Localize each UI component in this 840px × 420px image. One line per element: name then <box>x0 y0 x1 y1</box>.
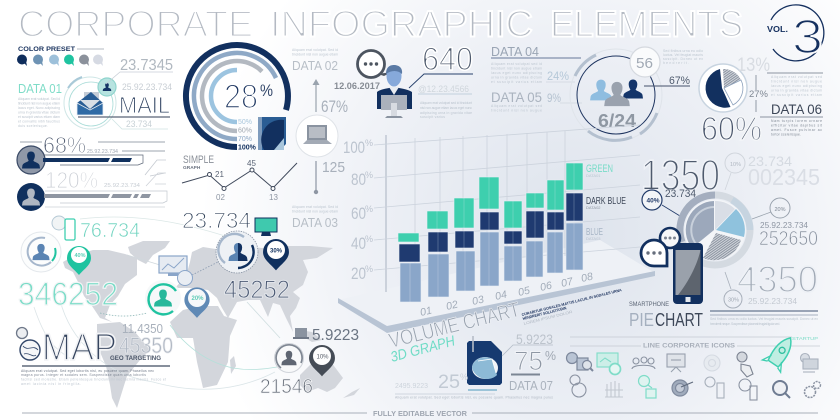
data 04 and 05: urna in gravida vitae dictum <box>491 76 542 80</box>
map avatar and pin 30%: 30% <box>270 248 283 254</box>
category labels: 06 <box>539 280 553 294</box>
map avatar and pin 30%: 45252 <box>224 276 290 304</box>
volume badge: 3 <box>792 11 823 64</box>
icon: rocket startup <box>762 332 800 372</box>
icon: monitor folder <box>800 354 818 372</box>
color preset: COLOR PRESET <box>18 46 75 53</box>
chart legend: GREEN <box>586 163 613 175</box>
chart axis labels: % <box>365 234 373 244</box>
bar 04 <box>479 177 499 286</box>
chart title <box>387 288 622 366</box>
chart legend: DATA02 <box>586 205 601 210</box>
map orbit lines <box>34 217 280 389</box>
chart axis labels: 20 <box>351 264 366 283</box>
data 04 and 05: DATA 05 <box>491 89 542 105</box>
data 02 and 03 column: DATA 03 <box>292 215 338 230</box>
map avatar and pin 10% <box>260 327 359 398</box>
pie chart with smartphone: 25.92.23.734 <box>760 221 809 230</box>
pie chart with smartphone: 40% <box>646 198 660 204</box>
icon: smartphone <box>673 243 703 304</box>
data 07 document pie: 5.9223 <box>516 331 553 347</box>
pie chart data 06: Nam turpis lorem ornare <box>771 119 822 123</box>
pie chart data 06: DATA 06 <box>771 101 822 117</box>
chart legend: DATA01 <box>586 173 601 178</box>
map avatar and pin 10%: 21546 <box>260 376 313 398</box>
map title block: MAP <box>42 327 117 369</box>
chart title: LOREM IPSUM DOLOR <box>523 310 573 326</box>
icon: team <box>632 357 655 369</box>
icon: target <box>672 380 693 396</box>
map avatar and pin 40%: 76.734 <box>80 220 140 242</box>
volume badge <box>767 5 824 64</box>
simple graph: 45 <box>247 159 256 168</box>
simple graph: 02 <box>216 193 225 202</box>
map title block: 11.4350 <box>122 321 163 336</box>
map avatar and pin 40% <box>18 216 140 312</box>
pie chart with smartphone: 20% <box>774 207 786 213</box>
bar 07 <box>547 180 564 273</box>
line corporate icons: LINE CORPORATE ICONS <box>643 342 735 350</box>
data 01 block: et convallis nibh faucibus <box>18 120 60 124</box>
mail icon and label: 25.92.23.734 <box>122 82 172 92</box>
chart axis labels: 40 <box>351 234 366 253</box>
pie chart with smartphone: 252650 <box>759 228 818 250</box>
data 04 and 05: 24% <box>547 69 569 83</box>
data 01 block: tincidunt nisl non augue etiam <box>18 102 60 106</box>
pie chart with smartphone: 1350 <box>641 151 720 200</box>
presenter icon with 640: @12.23.4566 <box>418 84 469 94</box>
icon: city chart <box>605 381 623 397</box>
category labels <box>419 271 594 319</box>
map avatar and pin 10%: 5.9223 <box>312 327 359 344</box>
category labels: 04 <box>494 289 508 303</box>
data 04 and 05: DATA 04 <box>491 44 539 59</box>
color preset <box>17 46 104 66</box>
bar 03 <box>454 198 475 291</box>
category labels: 03 <box>471 294 485 308</box>
data 01 block <box>18 81 62 128</box>
data 02 and 03 column <box>292 48 348 230</box>
chart grid <box>374 125 640 292</box>
bar 02 <box>427 211 449 297</box>
chart title: 3D GRAPH <box>389 333 457 366</box>
chart legend: BLUE <box>586 226 603 238</box>
data 01 block: urna in gravida vitae dictum <box>18 110 60 114</box>
simple graph: SIMPLE <box>183 154 214 166</box>
icon: teal presentation <box>597 353 620 374</box>
pie chart data 06 <box>699 55 823 147</box>
title: INFOGRAPHIC <box>270 4 533 44</box>
chart title: CURABITUR GOSALES MATTIS LACUS, IN SODALES URNA <box>521 288 622 317</box>
icon: teal chat <box>638 376 656 398</box>
bar 08 <box>566 163 583 270</box>
presenter icon with 640: suscipit varius <box>420 115 445 119</box>
donut pie <box>680 195 750 265</box>
chart legend: DARK BLUE <box>586 195 626 207</box>
presenter icon with 640: nisl non augue etiam lacus eget nunc <box>420 106 472 110</box>
data 07 document pie: 25 <box>438 372 460 393</box>
presenter icon with 640: 12.06.2017 <box>334 81 380 92</box>
data 04 and 05: et suscipit varius etiam <box>491 80 542 84</box>
data 02 and 03 column: Aliquam erat volutpat. Sed id <box>292 205 338 209</box>
team circle 6/24: 56 <box>636 55 653 72</box>
radial ring chart 28%: 70% <box>238 136 252 143</box>
pie chart data 06: amet. Fusce pulvinar ac <box>771 128 822 132</box>
line corporate icons: STARTUP <box>792 336 818 341</box>
pie chart data 06: tincidunt nisl non augue <box>771 80 822 84</box>
data 07 document pie: 2495.9223 <box>395 383 428 390</box>
chart axis labels: % <box>365 170 373 180</box>
data 07 document pie: DATA 07 <box>509 378 553 393</box>
data 07 document pie <box>395 331 556 400</box>
world map <box>63 241 360 408</box>
map avatar and pin 40%: 346252 <box>18 276 118 312</box>
icon: faded circle <box>704 355 720 371</box>
map title block: magna purus. Integer et sodales sem. Suspendisse quam urna lobortis <box>21 373 146 377</box>
chart legend: DATA03 <box>586 236 601 241</box>
presenter icon with 640 <box>334 41 473 119</box>
map title block: 45350 <box>119 333 173 358</box>
bar 05 <box>504 201 522 281</box>
map avatar and pin 30%: 23.734 <box>182 208 251 233</box>
data 02 and 03 column: 67% <box>321 98 348 116</box>
volume badge: VOL. <box>767 24 788 34</box>
presenter icon with 640: adipiscing urna in gravida vitae <box>420 111 472 115</box>
pie chart with smartphone: PIE <box>629 310 654 330</box>
map avatar and pin 30% <box>184 213 290 298</box>
pie chart with smartphone: CHART <box>655 310 703 330</box>
category labels: 07 <box>560 275 575 290</box>
pie chart with smartphone: 23.734 <box>665 188 696 200</box>
team circle 6/24: 6/24 <box>598 111 636 131</box>
progress 120%: 120% <box>45 167 98 193</box>
team circle 6/24: suscipit. Donec ut ex <box>663 57 703 61</box>
presenter icon with 640: 640 <box>422 41 473 77</box>
team circle 6/24 <box>570 47 703 141</box>
radial ring chart 28%: 50% <box>238 119 252 126</box>
progress 120%: 25.92.23.734 <box>104 183 140 189</box>
radial ring chart 28%: 100% <box>238 144 257 152</box>
chart platform <box>338 240 655 333</box>
icon: magnifier chart <box>566 352 593 371</box>
pie chart data 06: et suscipit varius etiam <box>771 93 822 97</box>
data 02 and 03 column: tincidunt nisl non augue etiam <box>292 210 338 214</box>
pie chart data 06: 27% <box>749 89 769 100</box>
title: ELEMENTS <box>550 4 743 44</box>
pie chart with smartphone: 23.734 <box>748 153 792 169</box>
title <box>18 4 743 44</box>
pie chart with smartphone: 25.92.23.734 <box>748 297 798 306</box>
pie chart with smartphone: SMARTPHONE <box>629 301 670 308</box>
data 01 block: duis scelerisque. <box>18 124 48 128</box>
chart axis labels <box>343 138 373 283</box>
mail icon and label: 23.734 <box>126 119 152 129</box>
progress 68% <box>17 132 166 176</box>
team circle 6/24: hendrerit. <box>663 61 689 65</box>
data 04 and 05 <box>491 44 582 112</box>
data 04 and 05: tincidunt nisl non augue <box>491 108 542 112</box>
data 01 block: Aliquam erat volutpat. Sed id <box>18 97 60 101</box>
progress 68%: 25.92.23.734 <box>87 149 118 155</box>
category labels: 02 <box>445 299 459 313</box>
pie chart data 06: urna in gravida vitae dictum <box>771 88 822 92</box>
category labels: 01 <box>419 305 433 319</box>
data 02 and 03 column: DATA 02 <box>292 58 338 73</box>
chart axis labels: % <box>365 204 373 214</box>
pie chart data 06: lacus eget nunc adipiscing <box>771 84 822 88</box>
chart title: HENDRERIT SOLLICITUDIN <box>522 306 567 321</box>
icon: chat bubbles <box>641 228 680 266</box>
team circle 6/24: luctus. Vel feugiat mauris <box>663 53 703 57</box>
icon: phone bubble <box>705 377 724 398</box>
pie chart with smartphone: 002345 <box>748 164 820 190</box>
icon: person gear <box>570 375 586 397</box>
pie chart with smartphone <box>629 151 820 330</box>
map title block <box>16 321 173 386</box>
progress 68%: 68% <box>43 132 86 158</box>
data 01 block: lacus eget. Nunc adipiscing <box>18 106 60 110</box>
map avatar and pin 10%: 10% <box>316 354 329 360</box>
chart legend <box>586 163 626 241</box>
pie chart data 06: tortor scelerisque. <box>771 132 801 136</box>
chart axis labels: 100 <box>343 138 365 157</box>
presenter icon with 640: Aliquam erat volutpat sed id tincidunt <box>420 101 472 105</box>
mail icon and label: MAIL <box>119 92 170 118</box>
pie chart with smartphone: 30% <box>728 298 739 304</box>
simple graph: 21 <box>215 170 224 179</box>
data 02 and 03 column: 125 <box>322 159 345 176</box>
category labels: 05 <box>517 285 531 299</box>
map avatar and pin 40%: 40% <box>74 253 86 259</box>
mail icon and label: 23.7345 <box>120 57 173 74</box>
icon: presentation board <box>667 354 685 372</box>
icon: chat face <box>773 381 790 398</box>
pie chart with smartphone: hendrerit neque. Suspendisse placerat feugiat ligula sed. <box>710 322 780 326</box>
radial ring chart 28%: 60% <box>238 128 252 134</box>
data 01 block: et suscipit varius etiam diam <box>18 115 60 119</box>
team circle 6/24: 67% <box>669 75 690 87</box>
map title block: amet lacinia nisl in fringilla. <box>21 382 81 386</box>
data 07 document pie: % <box>460 372 468 382</box>
data 07 document pie: % <box>545 348 556 363</box>
icon: phone chart <box>739 379 757 400</box>
map title block: GEO TARGETING <box>110 355 161 362</box>
pie chart with smartphone: 4350 <box>737 259 818 300</box>
data 04 and 05: Aliquam erat volutpat sed id <box>491 62 542 66</box>
radial ring chart 28%: % <box>260 81 273 100</box>
pie chart data 06: Aliquam erat volutpat sed <box>771 75 822 79</box>
team circle 6/24: Sed finibus urna eu odio <box>663 49 703 53</box>
line corporate icons <box>566 332 820 400</box>
simple graph <box>182 154 297 202</box>
data 07 document pie: Aliquam erat volutpat. Sed eget lobortis nisl, eu posuere quam. Phasellus nec magna purus <box>395 396 553 400</box>
simple graph: 13 <box>269 193 278 202</box>
simple graph: GRAPH <box>183 165 201 171</box>
icon: gears <box>804 382 820 398</box>
icon: hand coin <box>737 352 753 377</box>
progress 120% <box>17 167 167 211</box>
data 04 and 05: tincidunt nisl non augue etiam <box>491 66 542 70</box>
pie chart with smartphone: 10% <box>730 162 741 168</box>
mail icon and label <box>64 57 173 129</box>
footer: FULLY EDITABLE VECTOR <box>373 409 468 418</box>
map title block: facilisi sed molestie. Etiam pellentesque tincidunt mi nec lacinia mauris. Fusce et <box>21 378 166 382</box>
chart axis labels: 80 <box>351 170 366 189</box>
pie chart data 06: 13% <box>737 55 770 76</box>
data 04 and 05: 9% <box>547 91 561 105</box>
map avatar and pin 20% <box>145 256 210 318</box>
radial ring chart 28%: 28 <box>224 78 258 116</box>
data 04 and 05: Aliquam erat volutpat sed <box>491 104 542 108</box>
map avatar and pin 20%: 20% <box>192 296 204 302</box>
data 01 block: DATA 01 <box>18 81 62 96</box>
chart axis labels: % <box>365 138 373 148</box>
title: CORPORATE <box>18 4 253 44</box>
chart axis labels: 60 <box>351 204 366 223</box>
chart title: VOLUME CHART <box>387 298 522 353</box>
pie chart data 06: efficitur vitae dapibus sit <box>771 124 822 128</box>
chart axis labels: % <box>365 264 373 274</box>
data 04 and 05: lacus eget nunc adipiscing <box>491 71 542 75</box>
data 07 document pie: 75 <box>514 346 543 376</box>
3D volume chart <box>338 125 655 366</box>
pie chart data 06: 60% <box>701 110 762 147</box>
bar 06 <box>526 193 544 277</box>
map title block: Aliquam erat volutpat. Sed eget lobortis nisl, eu posuere quam. Phasellus nec <box>21 369 154 373</box>
pie chart with smartphone: Sed finibus urna eu odio luctus. Vel feugiat mauris suscipit. Donec ut ex <box>710 317 818 321</box>
data 02 and 03 column: Aliquam erat volutpat. Sed id <box>292 48 338 52</box>
radial ring chart 28% <box>186 45 288 152</box>
category labels: 08 <box>580 271 594 285</box>
bar 01 <box>398 233 421 302</box>
data 02 and 03 column: tincidunt nisl non augue etiam <box>292 52 338 56</box>
